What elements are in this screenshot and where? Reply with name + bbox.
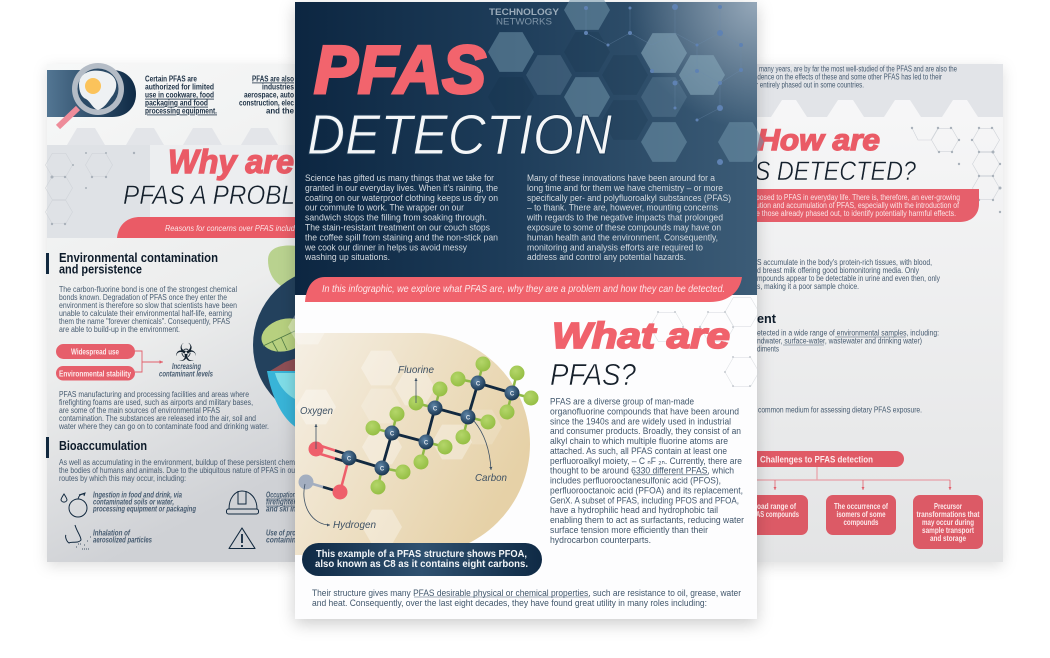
decoration group: faint hex net [650,297,759,387]
box: broad range of compounds: AS compounds [756,510,799,519]
callout: PFOA caption: also known as C8 as it contains eight carbons. [315,559,528,570]
text: products [266,529,296,545]
section: bioaccumulation [46,437,297,549]
carbon atoms [342,376,520,476]
illustration: magnifying glass over egg [47,63,136,127]
heading: how are PFAS detected: How are [757,124,880,157]
text: intro column 1: we cook our dinner in helps us avoid messy [304,242,467,252]
box: precursor transformations [913,495,983,549]
heading: bioaccumulation [46,437,147,458]
icon: hard hat [226,491,258,514]
beige hexagons [288,310,502,544]
banner: in this infographic: In this infographic, we explore what PFAS are, why they are a problem and how they can be detected. [322,283,725,295]
text: authorized uses: authorized for limited [145,83,214,92]
oxygen atoms [308,442,348,500]
text: authorized uses [145,74,217,116]
banner: reasons for concern [117,217,302,238]
text: intro column 1: Science has gifted us many things that we take for [305,173,494,183]
text: bioaccumulation intro [59,458,295,483]
icon: warning triangle [229,528,255,548]
text: what are PFAS description: since the 1940s and are widely used in industrial [550,416,731,426]
carbon atoms: C [433,406,438,412]
banner: exposure [740,189,979,222]
text: intro column 1: washing up situations. [304,252,390,262]
text: what are PFAS description: hydrocarbon counterparts. [550,535,651,545]
text: intro column 1: the coffee spill from staining and the non-stick pan [305,232,498,242]
text: carbon-fluorine bond: environment is therefore so slow that scientists have been [59,301,237,310]
text: what are PFAS description: perfluoroalkyl moiety, – C ₙF ₂ₙ. Currently, there are [550,456,742,466]
box: precursor transformations: sample transport [922,526,974,535]
text: carbon-fluorine bond [59,285,237,334]
text: sources of contamination: contamination. The substances are released into the air, soil and [59,414,256,423]
box: precursor transformations: transformations that [916,510,980,519]
text: structure and properties: and heat. Consequently, over the last eight decades, they have found great utility in many roles including: [312,598,707,608]
text: intro column 1: The stain-resistant treatment on our couch stops [305,222,490,232]
carbon atoms: C [424,440,429,446]
text: what are PFAS description: organofluorine compounds that have been around [550,406,739,416]
text: what are PFAS description: includes perfluorooctanesulfonic acid (PFOS), [550,476,721,486]
text: inhalation [93,529,153,545]
text: sources of contamination [58,390,269,431]
text: authorized uses: packaging and food [145,99,208,108]
text: PFOS and PFOA intro: r entirely phased out in some countries. [756,80,864,90]
label: oxygen: Oxygen [300,405,333,417]
title: PFAS: PFAS [314,32,486,108]
heading: Why are PFAS a problem: PFAS A PROBLEM? [123,180,345,210]
label: hydrogen: Hydrogen [333,519,376,531]
text: intro column 1 [304,173,498,262]
flow: causes of increasing contaminant levels: contaminant levels [159,370,214,378]
hexagon pattern [488,0,764,165]
illustration: plant and water globe [253,246,407,428]
text: structure and properties: Their structure gives many PFAS desirable physical or chemical properties, such are resistance to oil, grease, water [312,588,741,598]
text: what are PFAS description: perfluorooctanoic acid (PFOA) and its replacement, [550,485,743,495]
text: bioaccumulation intro: As well as accumulating in the environment, buildup of these persistent chem [59,458,295,467]
text: intro column 2: – to thank. There are, however, mounting concerns [527,203,718,213]
text: intro column 2 [526,173,731,262]
box: precursor transformations: may occur during [922,518,974,527]
panel: PFAS detection (centre page) [288,0,764,619]
text: ingestion: contaminated soils or water, [93,498,174,507]
text: other industries: industries [262,83,294,92]
text: biomonitoring: s, making it a poor sample choice. [757,282,859,291]
text: what are PFAS description: alkyl chain to which multiple fluorine atoms are [550,436,728,446]
flow: causes of increasing contaminant levels: Increasing [172,362,201,371]
heading: Why are PFAS a problem [123,143,345,210]
text: PFOS and PFOA intro [756,64,957,90]
carbon atoms: C [380,466,385,472]
text: authorized uses: use in cookware, food [145,91,214,100]
carbon atoms: C [390,432,395,438]
text: products: Use of pro [266,529,296,538]
text: PFOS and PFOA intro: idence on the effects of these and some other PFAS has led to their [756,72,942,82]
text: authorized uses: processing equipment. [145,106,217,116]
label: oxygen [300,405,333,449]
carbon atoms: C [476,382,481,388]
icon: biohazard: ☣ [175,338,197,367]
box: isomers: compounds [844,518,879,527]
text: ingestion [92,491,196,514]
section: environment: diments [757,345,779,354]
banner: reasons for concern: Reasons for concerns over PFAS include: [165,223,302,233]
label: carbon [474,421,507,484]
heading: What are PFAS: What are [552,315,730,356]
box: precursor transformations: Precursor [934,502,962,511]
heading: bioaccumulation: Bioaccumulation [59,439,147,453]
text: occupational exposure: Occupation [266,491,296,500]
panel: why are PFAS a problem (left page) [46,63,407,562]
logo: Technology Networks [489,7,559,26]
label: fluorine: Fluorine [398,364,434,376]
icon: fruit and water drop [61,493,87,517]
text: authorized uses: Certain PFAS are [145,74,197,84]
text: what are PFAS description: enabling them to act as surfactants, reducing water [550,515,744,525]
text: biomonitoring: d breast milk offering good biomonitoring media. Only [757,266,919,275]
text: intro column 2: monitoring and analysis efforts are required to [527,242,703,252]
text: PFOS and PFOA intro: many years, are by far the most well-studied of the PFAS and are also the [759,64,957,74]
hydrogen atom [298,474,314,490]
heading: What are PFAS [550,315,730,392]
molecule: PFOA [298,356,538,500]
section: environment: ent [757,312,777,326]
fluorine atoms [366,356,538,494]
section: molecular diagram [288,310,542,576]
text: ingestion: Ingestion in food and drink, via [93,491,183,500]
text: other industries: aerospace, auto [244,91,294,100]
text: intro column 2: human health and the environment. Consequently, [527,232,718,242]
text: carbon-fluorine bond: are able to build-up in the environment. [59,325,180,334]
text: intro column 2: Many of these innovations have been around for a [527,173,715,183]
flow: causes of increasing contaminant levels [56,338,214,380]
banner: in this infographic [305,277,742,302]
box: precursor transformations: and storage [930,534,967,543]
box: isomers: isomers of some [836,510,886,519]
heading: how are PFAS detected: PFAS DETECTED? [711,156,916,186]
text: biomonitoring: mpounds appear to be detectable in urine and even then, only [757,274,940,283]
banner: exposure: e those already phased out, to identify potentially harmful effects. [756,209,956,218]
flow: challenges to PFAS detection [740,451,983,549]
text: intro column 1: sandwich stops the filling from soaking through. [305,213,487,223]
box: broad range of compounds [740,495,808,535]
text: carbon-fluorine bond: unable to calculate their environmental half-life, earning [59,309,232,318]
text: inhalation: Inhalation of [93,529,131,538]
label: carbon: Carbon [475,472,507,484]
section: environment [757,312,939,354]
text: what are PFAS description: attached. As such, all PFAS contain at least one [550,446,727,456]
banner: exposure: posed to PFAS in everyday life. There is, therefore, an ever-growing [756,193,960,202]
text: products: containin [266,536,296,545]
beige backdrop [295,333,530,555]
text: occupational exposure: firefighter [266,498,297,507]
heading: environmental contamination and persistence: Environmental contamination [59,251,218,265]
title: Detection: DETECTION [307,103,613,167]
text: sources of contamination: firefighting foams are used, such as airports and military bases, [59,398,253,407]
band: hexagon header strip [46,128,297,238]
band: hexagon header strip [740,64,1003,213]
text: biomonitoring: S accumulate in the body's protein-rich tissues, with blood, [757,258,932,267]
flow: challenges to PFAS detection: Challenges to PFAS detection [760,454,873,466]
text: what are PFAS description: have a hydrophilic head and hydrophobic tail [550,505,718,515]
heading: What are PFAS: PFAS? [550,357,637,392]
callout: PFOA caption: This example of a PFAS structure shows PFOA, [316,549,527,560]
carbon atoms: C [510,392,515,398]
text: sources of contamination: water where they can go on to contaminate food and drinking water. [58,422,269,431]
flow: causes of increasing contaminant levels: Environmental stability [59,369,131,378]
bonds [349,383,512,468]
heading: how are PFAS detected [711,124,916,186]
text: what are PFAS description [550,397,744,545]
text: carbon-fluorine bond: The carbon-fluorine bond is one of the strongest chemical [59,285,237,294]
text: other industries: construction, elec [239,99,294,108]
label: fluorine [398,364,434,403]
text: sources of contamination: are some of the main sources of environmental PFAS [59,406,220,415]
logo: Technology Networks: TECHNOLOGY [489,7,559,17]
text: inhalation: aerosolized particles [93,536,153,545]
text: other industries [239,74,295,116]
section: environmental contamination [46,251,269,431]
text: other industries: PFAS are also [252,74,294,84]
carbon atoms: C [466,416,471,422]
text: intro column 1: coating on our waterproof clothing keeps us dry on [305,193,498,203]
heading: Why are PFAS a problem: Why are [168,143,294,180]
carbon atoms: C [347,456,352,462]
text: occupational exposure [266,491,297,514]
box: broad range of compounds: oad range of [757,502,796,511]
label: hydrogen [304,484,376,531]
section: environment: etected in a wide range of environmental samples, including: [757,329,939,338]
text: sources of contamination: PFAS manufacturing and processing facilities and areas where [59,390,249,399]
text: intro column 2: address and control any potential hazards. [527,252,686,262]
heading: environmental contamination and persistence [46,251,218,276]
box: isomers [826,495,896,535]
section: environment: ndwater, surface-water, wastewater and drinking water) [757,337,922,346]
text: carbon-fluorine bond: them the name "forever chemicals". Consequently, PFAS [59,317,230,326]
text: intro column 2: long time and for them we have chemistry – or more [527,183,723,193]
icon: nose inhalation [66,525,91,549]
text: intro column 1: granted in our everyday lives. When it’s raining, the [305,183,498,193]
text: other industries: and the [266,106,295,116]
text: what are PFAS description: PFAS are a diverse group of man-made [550,397,694,407]
header: dark cover block [295,0,764,295]
text: dietary exposure: common medium for assessing dietary PFAS exposure. [758,406,922,415]
text: intro column 2: with regards to the negative impacts that prolonged [526,213,723,223]
text: intro column 2: exposure to some of these compounds may have on [527,222,721,232]
text: what are PFAS description: and consumer products. Broadly, they consist of an [550,426,741,436]
text: bioaccumulation intro: routes by which this may occur, including: [59,474,186,483]
flow: causes of increasing contaminant levels: Widespread use [71,348,119,356]
panel: how are PFAS detected (right page) [711,64,1003,562]
text: occupational exposure: and ski in [266,505,296,514]
banner: exposure: ution and accumulation of PFAS, especially with the introduction of [756,201,960,210]
callout: PFOA caption [302,543,542,576]
text: carbon-fluorine bond: bonds known. Degradation of PFAS once they enter the [59,293,227,302]
text: biomonitoring [757,258,940,291]
text: bioaccumulation intro: the bodies of humans and animals. Due to the ubiquitous nature of PFAS in ou [59,466,295,475]
text: what are PFAS description: surface tension more efficiently than their [550,525,708,535]
heading: environmental contamination and persistence: and persistence [59,262,142,276]
text: ingestion: processing equipment or packaging [92,505,196,514]
text: what are PFAS description: thought to be around 6330 different PFAS, which [550,466,734,476]
text: intro column 1: our commute to work. The wrapper on our [305,203,464,213]
text: intro column 2: specifically per- and polyfluoroalkyl substances (PFAS) [527,193,731,203]
text: what are PFAS description: GenX. A subset of PFAS, including PFOS and PFOA, [550,495,739,505]
box: isomers: The occurrence of [834,502,888,511]
text: structure and properties [312,588,741,608]
logo: Technology Networks: NETWORKS [496,16,552,26]
